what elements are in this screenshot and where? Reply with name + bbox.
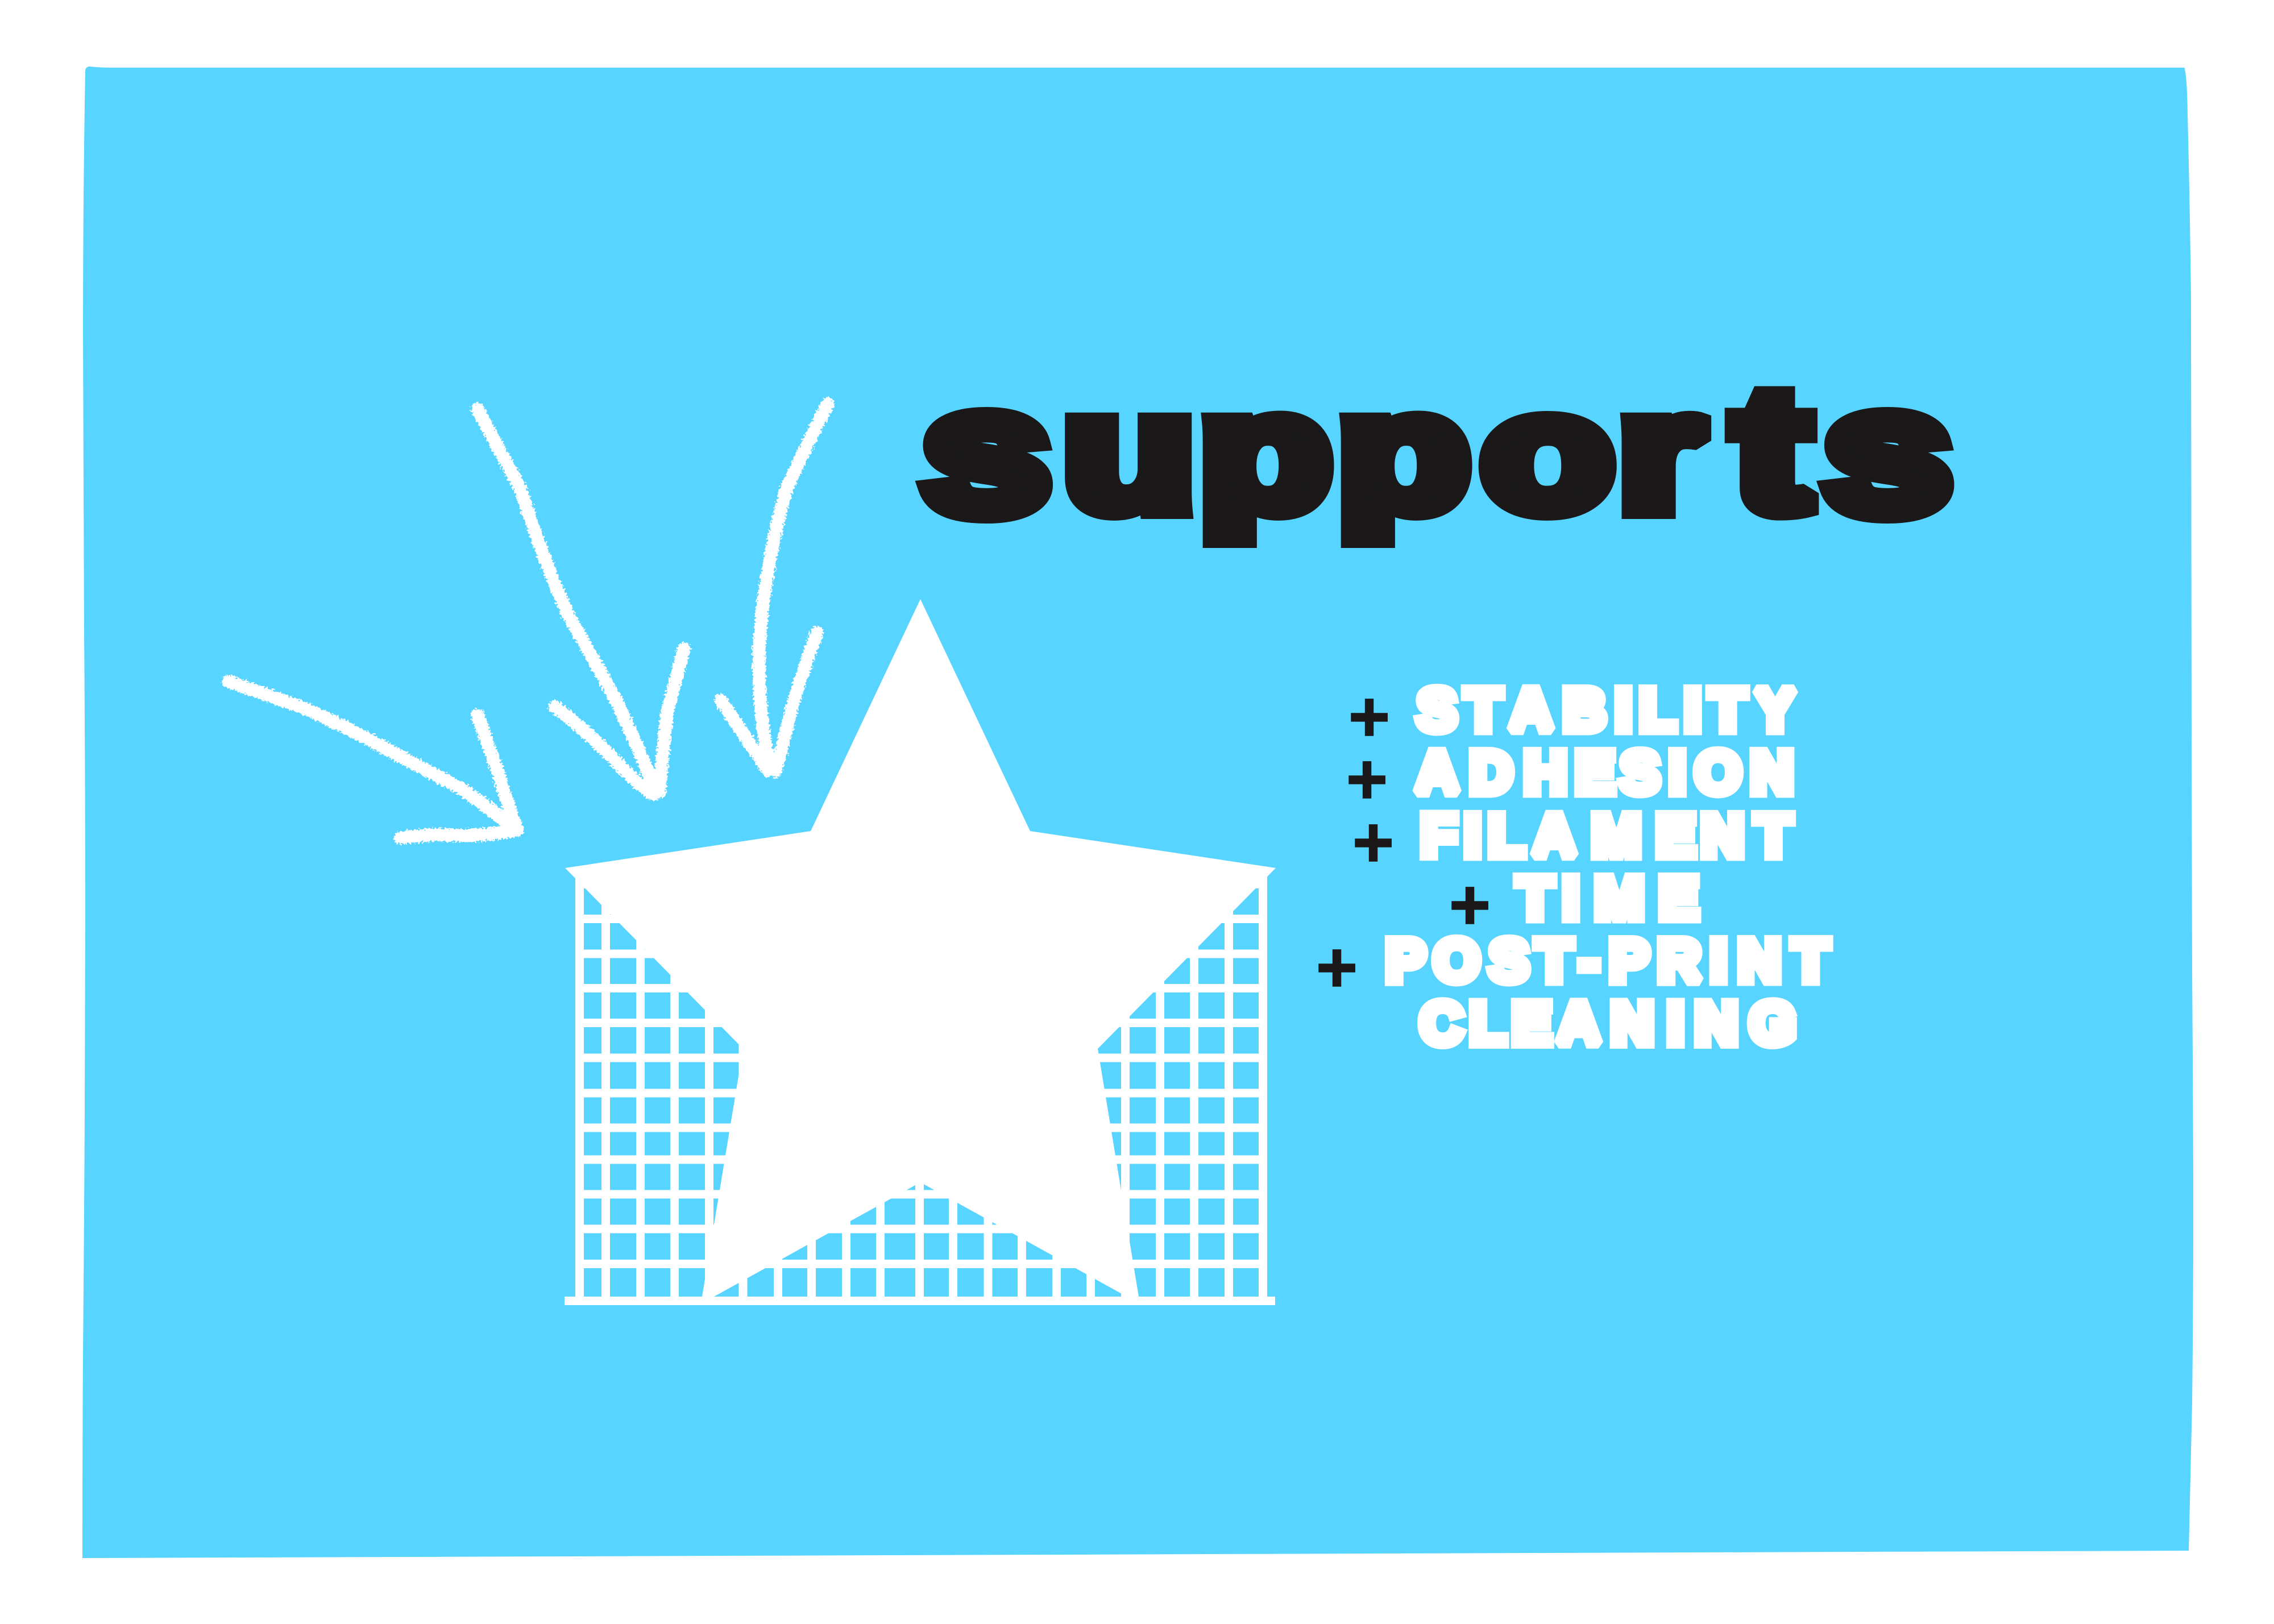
list item: post-print: POST-PRINT bbox=[1386, 928, 1829, 994]
list item: cleaning: CLEANING bbox=[1420, 991, 1795, 1057]
arrow: left bbox=[229, 682, 517, 838]
list item: filament: FILAMENT bbox=[1421, 803, 1791, 869]
title: r bbox=[1619, 360, 1702, 545]
title: p bbox=[1339, 360, 1468, 545]
arrows: chalk arrows pointing at star bbox=[229, 404, 828, 838]
icon: plus 1: + bbox=[1348, 676, 1390, 757]
title: s bbox=[1824, 352, 1951, 550]
list item: stability: STABILITY bbox=[1417, 678, 1795, 744]
icon: plus 2: + bbox=[1346, 739, 1388, 819]
list: support costs bbox=[1316, 676, 1829, 1057]
title: p bbox=[1200, 360, 1330, 545]
list item: time: TIME bbox=[1517, 865, 1699, 931]
icon: plus 5: + bbox=[1316, 927, 1358, 1007]
icon: white star bbox=[565, 599, 1276, 1297]
arrow: middle bbox=[478, 409, 684, 795]
icon: plus 3: + bbox=[1352, 802, 1394, 882]
chart: support grid under star bbox=[565, 875, 1275, 1305]
title: u bbox=[1064, 360, 1194, 545]
icon: plus 4: + bbox=[1449, 865, 1491, 945]
list item: adhesion: ADHESION bbox=[1416, 740, 1793, 806]
title bbox=[915, 386, 1955, 548]
title: t bbox=[1734, 352, 1809, 546]
title: o bbox=[1483, 360, 1613, 545]
title: s bbox=[923, 352, 1050, 550]
arrow: right bbox=[721, 404, 828, 771]
